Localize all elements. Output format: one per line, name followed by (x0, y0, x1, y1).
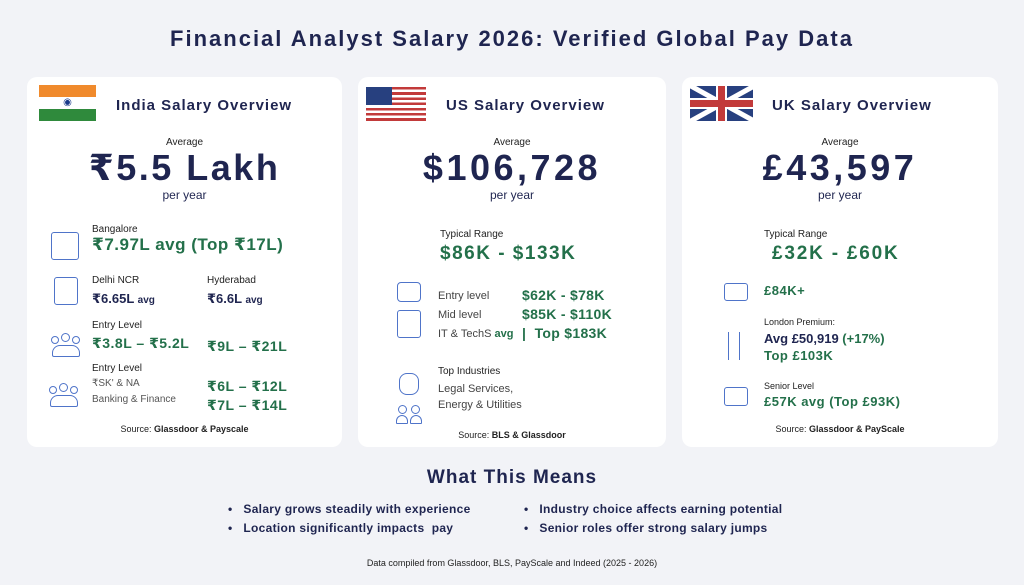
senior: £57K avg (Top £93K) (764, 394, 900, 409)
average: ₹5.5 Lakh (89, 147, 280, 188)
icon: arrows (728, 332, 740, 360)
average: Average (821, 137, 859, 148)
senior: Senior Level (764, 381, 814, 391)
heading: UK Salary Overview (772, 97, 932, 114)
Entry level: ₹9L – ₹21L (207, 338, 287, 354)
text: • Industry choice affects earning potential (524, 502, 782, 516)
panel: US: $62K - $78K (522, 287, 605, 303)
icon: India flag (39, 85, 96, 121)
panel: UK (682, 77, 998, 447)
levels (438, 290, 513, 340)
average: per year (490, 188, 534, 202)
panel: US: | Top $183K (522, 325, 607, 341)
icon: chart (51, 232, 79, 260)
Entry level industries: ₹SK' & NA (92, 378, 140, 389)
icon: document (54, 277, 78, 305)
panel: US: $85K - $110K (522, 306, 612, 322)
footer: Data compiled from Glassdoor, BLS, PayScale and Indeed (2025 - 2026) (367, 558, 657, 568)
London: Top £103K (764, 348, 833, 363)
Delhi (92, 275, 155, 306)
source: Source: Glassdoor & PayScale (775, 424, 905, 434)
icon: industries (396, 373, 422, 424)
top industries: Top Industries (438, 366, 500, 377)
Bangalore: ₹7.97L avg (Top ₹17L) (92, 235, 283, 254)
average: Average (166, 137, 203, 148)
levels: Entry level (438, 290, 489, 302)
levels: Mid level (438, 309, 481, 321)
heading: India Salary Overview (116, 97, 292, 114)
Bangalore: Bangalore (92, 224, 138, 235)
Entry level industries (92, 363, 287, 413)
typical range: $86K - $133K (440, 243, 576, 264)
average (89, 137, 280, 202)
typical range (764, 229, 900, 264)
icon: UK flag (690, 86, 753, 121)
Entry level industries: ₹7L – ₹14L (207, 397, 287, 413)
London (764, 317, 885, 363)
Entry level (92, 320, 287, 354)
typical range: Typical Range (440, 229, 503, 240)
panel: US (358, 77, 666, 447)
icon: case (724, 387, 748, 406)
icon: briefcase (724, 283, 748, 301)
heading: US Salary Overview (446, 97, 605, 114)
senior (764, 381, 900, 409)
Delhi: ₹6.65L avg (92, 291, 155, 306)
icon: India flag: ◉ (63, 97, 72, 108)
London: Avg £50,919 (+17%) (764, 331, 885, 346)
Hyderabad: ₹6.6L avg (207, 291, 263, 306)
top industries: Energy & Utilities (438, 399, 522, 411)
Delhi: Delhi NCR (92, 275, 139, 286)
average (763, 137, 917, 202)
source: Source: Glassdoor & Payscale (120, 424, 249, 434)
icon: people 2 (49, 383, 78, 407)
Bangalore (92, 224, 283, 254)
levels: IT & TechS avg (438, 328, 513, 340)
top industries: Legal Services, (438, 383, 513, 395)
average: $106,728 (423, 147, 601, 188)
average: Average (493, 137, 531, 148)
panel: India (27, 77, 342, 447)
average: £43,597 (763, 147, 917, 188)
icon: buildings (397, 282, 421, 338)
typical range: Typical Range (764, 229, 827, 240)
average: per year (162, 188, 207, 202)
bullets (228, 502, 471, 535)
Entry level: Entry Level (92, 320, 142, 331)
Entry level industries: Banking & Finance (92, 394, 176, 405)
Entry level: ₹3.8L – ₹5.2L (92, 335, 189, 351)
Entry level industries: ₹6L – ₹12L (207, 378, 287, 394)
section heading: What This Means (427, 467, 597, 488)
Hyderabad (207, 275, 263, 306)
Hyderabad: Hyderabad (207, 275, 256, 286)
Entry level industries: Entry Level (92, 363, 142, 374)
bullets: • Location significantly impacts pay (228, 521, 453, 535)
84K: £84K+ (764, 283, 805, 298)
London: London Premium: (764, 317, 835, 327)
average: per year (818, 188, 862, 202)
icon: people (51, 333, 80, 357)
icon: US flag (366, 87, 426, 121)
top industries (438, 366, 522, 411)
text: • Senior roles offer strong salary jumps (524, 521, 768, 535)
title: Financial Analyst Salary 2026: Verified Global Pay Data (170, 26, 854, 51)
average (423, 137, 601, 202)
typical range: £32K - £60K (772, 243, 900, 264)
typical range (440, 229, 576, 264)
source: Source: BLS & Glassdoor (458, 430, 566, 440)
bullets: • Salary grows steadily with experience (228, 502, 471, 516)
